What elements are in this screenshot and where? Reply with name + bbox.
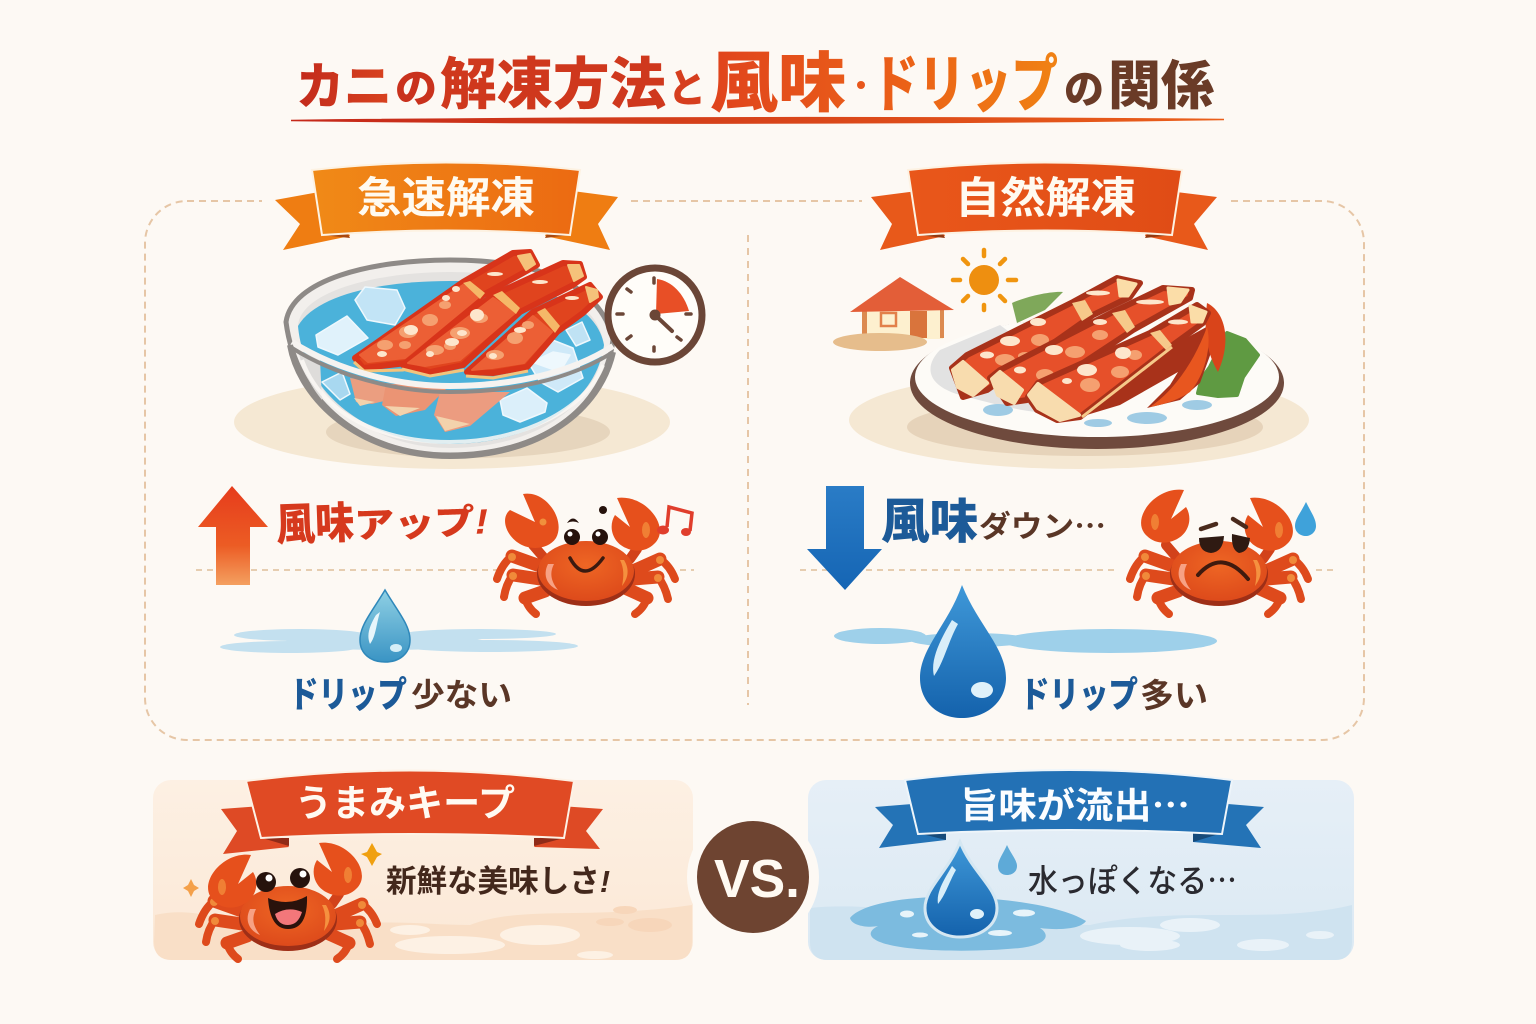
eyes and brows (1199, 536, 1224, 553)
title: 関係 (1108, 57, 1214, 116)
plate ground shadow (849, 371, 1309, 469)
puddle: small (220, 629, 578, 653)
icon: drop (925, 842, 997, 937)
right claw (612, 498, 660, 551)
title: 風味 (710, 46, 846, 120)
illustration: plate with crab legs (849, 278, 1309, 469)
water puddles on plate (983, 400, 1212, 427)
crab leg 1 (354, 252, 537, 371)
icon: large drop (920, 585, 1006, 718)
panel: うまみキープ (153, 770, 693, 960)
ribbon: 急速解凍: 急速解凍 (357, 175, 535, 223)
left claw (208, 855, 256, 908)
text: 新鮮な美味しさ: 新鮮な美味しさ! (386, 864, 610, 899)
title: 解凍方法 (440, 53, 666, 116)
crab: sad (1130, 490, 1308, 614)
badge: VS (687, 811, 819, 943)
ribbon: 旨味が流出 (875, 770, 1264, 848)
text: ドリップ多い: ドリップ (1020, 674, 1138, 715)
bowl ground shadow (234, 375, 670, 469)
icon: house (833, 277, 954, 351)
ribbon: 自然解凍: 自然解凍 (955, 175, 1136, 223)
eyes and brows (564, 506, 608, 545)
ribbon: 自然解凍 (871, 162, 1217, 250)
crab: smiling (199, 843, 377, 959)
title: の (395, 67, 437, 111)
ribbon: 急速解凍 (275, 162, 618, 250)
title (291, 46, 1224, 123)
crab leg 2 (990, 288, 1192, 403)
text: 水っぽくなる: 水っぽくなる… (1028, 856, 1237, 902)
lettuce (1012, 292, 1063, 323)
text: ドリップ少ない (289, 674, 512, 715)
title: カニ (296, 59, 392, 115)
text: 風味ダウン: ダウン… (979, 502, 1106, 546)
icon: clock (608, 268, 702, 362)
icon: sweat drop (1295, 502, 1316, 536)
legs under water (350, 378, 400, 404)
ribbon: 旨味が流出: 旨味が流出 … (960, 777, 1190, 829)
illustration: ice water bowl with crab legs (234, 252, 670, 469)
text: 風味ダウン: 風味 (881, 496, 978, 549)
arrow: flavor up (198, 486, 268, 585)
text: ドリップ少ない: 少ない (411, 677, 512, 713)
text: ドリップ多い: 多い (1140, 677, 1208, 714)
icon: small drop (360, 590, 410, 662)
title: ドリップ (872, 51, 1058, 120)
ribbon: うまみキープ: うまみキープ (295, 783, 515, 824)
puddle: blue (850, 897, 1086, 951)
claw pieces (1080, 303, 1225, 417)
plate (910, 317, 1284, 449)
text: 風味ダウン (881, 496, 1106, 549)
right claw (314, 843, 362, 896)
sparkles (361, 843, 382, 866)
crab leg 2 (402, 263, 584, 376)
text: ドリップ少ない: ドリップ (289, 674, 407, 715)
crab leg 3 (466, 285, 600, 378)
divider: flavor row left (196, 569, 694, 571)
right claw (1245, 498, 1293, 551)
left claw (1141, 490, 1189, 543)
arrow: flavor down (807, 486, 882, 590)
panel: 旨味が流出 (808, 770, 1354, 960)
icon: music note (657, 507, 692, 536)
text: 風味アップ: 風味 (275, 499, 355, 551)
ice cubes (316, 287, 590, 422)
panel: comparison dashed frame (145, 201, 1364, 740)
title: と (668, 67, 706, 111)
icon: sun (953, 250, 1016, 310)
water (298, 281, 604, 444)
divider: flavor row right (800, 569, 1336, 571)
text: 風味アップ (275, 494, 489, 551)
bowl front rim (292, 348, 613, 392)
text: 風味アップ: アップ ! (354, 502, 489, 546)
crab: happy (497, 494, 675, 614)
title: の (1064, 68, 1104, 112)
crab leg 3 (1028, 305, 1208, 420)
crab leg 1 (952, 278, 1140, 397)
icon: small drop (998, 845, 1017, 875)
ribbon: うまみキープ (221, 770, 603, 854)
glass bowl back (286, 260, 613, 455)
left claw (505, 494, 559, 548)
badge: VS: VS. (714, 849, 800, 909)
puddle: large (834, 628, 1217, 653)
